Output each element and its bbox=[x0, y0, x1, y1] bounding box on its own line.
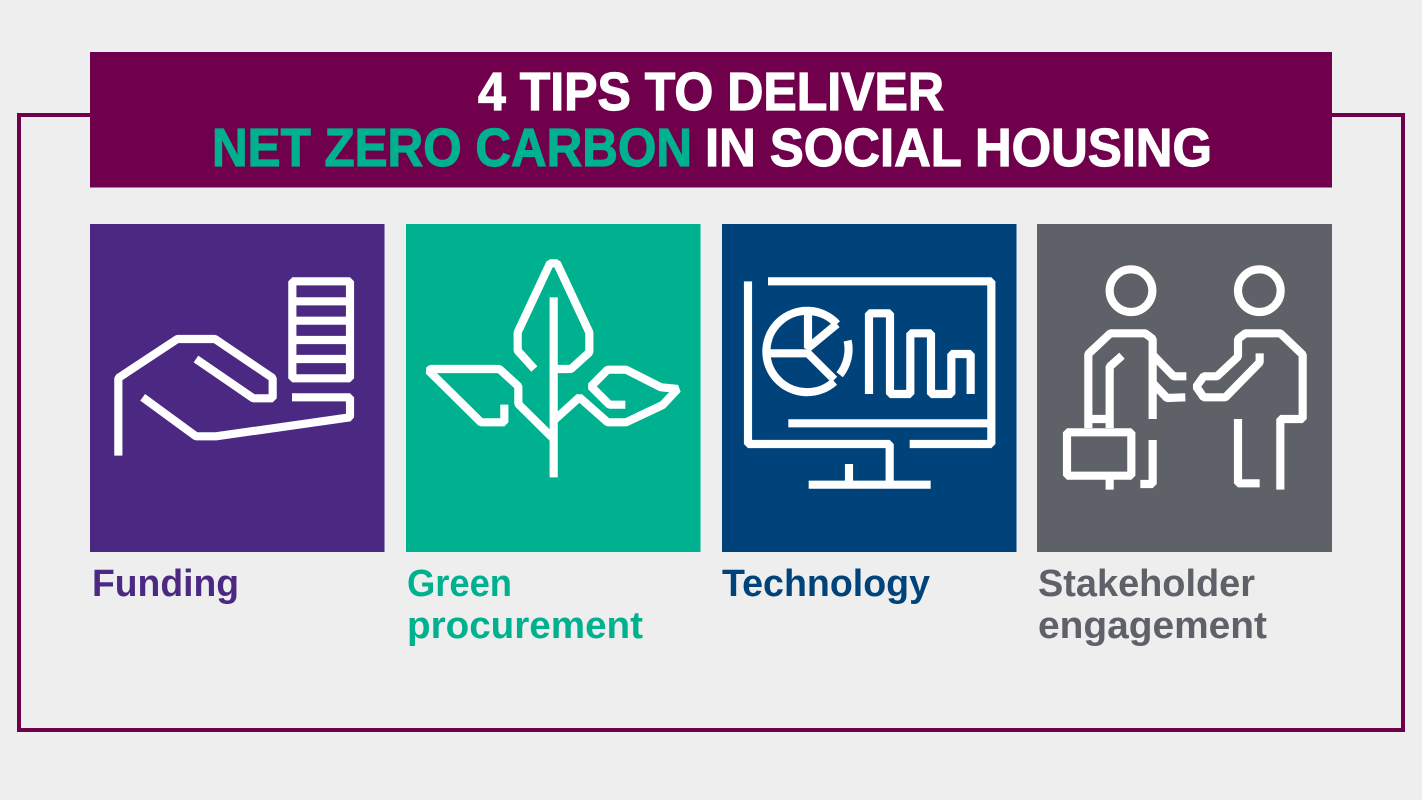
label: funding: Funding bbox=[92, 563, 239, 605]
label: green procurement: Green bbox=[407, 563, 512, 605]
icon: monitor with charts bbox=[748, 281, 991, 485]
outer frame bbox=[19, 115, 1403, 730]
label: stakeholder engagement: engagement bbox=[1038, 605, 1267, 647]
label: green procurement: procurement bbox=[407, 605, 643, 647]
icon: two people shaking hands bbox=[1067, 269, 1303, 490]
label: stakeholder engagement: Stakeholder bbox=[1038, 563, 1255, 605]
panel: stakeholder engagement bbox=[1037, 224, 1332, 552]
panel: technology bbox=[722, 224, 1016, 552]
panel: funding bbox=[90, 224, 384, 552]
icon: plant bbox=[429, 263, 678, 477]
title line 2 highlighted: NET ZERO CARBON bbox=[212, 118, 692, 178]
title line 1: 4 TIPS TO DELIVER bbox=[478, 62, 944, 122]
panel: green procurement bbox=[406, 224, 700, 552]
icon: hand with coins bbox=[118, 281, 350, 456]
label: stakeholder engagement bbox=[1038, 563, 1267, 647]
title line 2 remainder: IN SOCIAL HOUSING bbox=[705, 118, 1212, 178]
label: technology: Technology bbox=[722, 563, 930, 605]
label: green procurement bbox=[407, 563, 643, 647]
title banner bbox=[90, 52, 1332, 188]
